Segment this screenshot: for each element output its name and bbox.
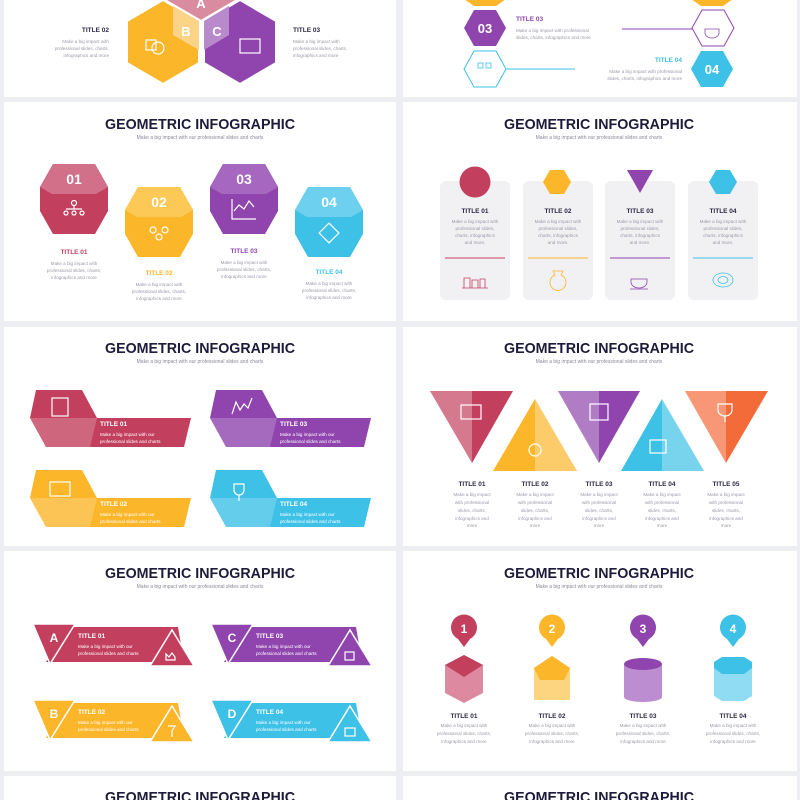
banner 04: professional slides and charts	[280, 519, 341, 524]
text: title 02: infographics and more	[136, 296, 182, 301]
text: title 04: infographics and more	[306, 295, 352, 300]
heading: Make a big impact with our professional slides and charts	[536, 584, 663, 590]
card 02: Make a big impact with	[535, 219, 582, 224]
item 4: professional slides, charts,	[706, 731, 760, 736]
banner B	[33, 700, 194, 742]
triangle titles: Make a big impact	[707, 492, 745, 497]
text: title 04: professional slides, charts,	[302, 288, 356, 293]
banner 03: TITLE 03	[280, 421, 307, 428]
triangle 03	[558, 391, 640, 463]
text: title 04: Make a big impact with professional	[609, 69, 682, 74]
heading	[105, 340, 295, 365]
panel: shape cards	[440, 116, 758, 300]
triangle titles	[453, 481, 745, 528]
card 03: TITLE 03	[626, 208, 654, 215]
outline hexagon with cup icon	[622, 10, 734, 46]
text: title 03: TITLE 03	[516, 16, 543, 23]
banner 01: professional slides and charts	[100, 439, 161, 444]
heading: Make a big impact with our professional slides and charts	[137, 359, 264, 365]
hexagon 04: 04	[705, 62, 720, 77]
triangle titles: Make a big impact	[516, 492, 554, 497]
triangle titles: infographics and	[645, 516, 679, 521]
text: title 01	[47, 249, 101, 280]
item 4: infographics and more	[710, 739, 756, 744]
octagon 04	[295, 187, 363, 257]
triangle titles: more	[467, 523, 478, 528]
text: title 02: professional slides, charts,	[55, 46, 109, 51]
banner 02: professional slides and charts	[100, 519, 161, 524]
card 01: and more.	[465, 240, 485, 245]
text: title 04: slides, charts, infographics and more	[607, 76, 682, 81]
hexagon 04	[691, 51, 733, 87]
text: title 04	[607, 57, 682, 81]
text: title 02: professional slides, charts,	[132, 289, 186, 294]
item 3: professional slides, charts,	[616, 731, 670, 736]
card 03: professional slides,	[620, 226, 660, 231]
octagon 02	[125, 187, 193, 257]
triangle titles: infographics and	[582, 516, 616, 521]
text: title 02	[132, 270, 186, 301]
heading: Make a big impact with our professional slides and charts	[137, 135, 264, 141]
banner C: TITLE 03	[256, 633, 283, 640]
item 2: professional slides, charts,	[525, 731, 579, 736]
text: title 02: TITLE 02	[145, 270, 173, 277]
panel: triangles	[430, 340, 768, 528]
text: title 03: infographics and more	[293, 53, 339, 58]
triangle titles: infographics and	[455, 516, 489, 521]
card 02: and more.	[548, 240, 568, 245]
item 3: 3	[640, 622, 647, 636]
triangle titles: more	[594, 523, 605, 528]
text: title 02: Make a big impact with	[136, 282, 183, 287]
banner 01: Make a big impact with our	[100, 432, 155, 437]
banner 01	[30, 390, 191, 447]
partial yellow hexagons	[464, 0, 733, 6]
card 04: and more.	[713, 240, 733, 245]
heading: GEOMETRIC INFOGRAPHIC	[504, 116, 694, 133]
card 04: TITLE 04	[709, 208, 737, 215]
heading: GEOMETRIC INFOGRAPHIC	[105, 116, 295, 133]
banner D: TITLE 04	[256, 709, 283, 716]
item 2	[525, 614, 579, 744]
triangle 02	[493, 399, 577, 471]
text: title 01: infographics and more	[51, 275, 97, 280]
triangle titles: with professional	[518, 500, 552, 505]
triangle titles: Make a big impact	[580, 492, 618, 497]
card 01: TITLE 01	[461, 208, 489, 215]
heading	[504, 340, 694, 365]
item 4: TITLE 04	[719, 713, 747, 720]
triangle titles: with professional	[582, 500, 616, 505]
text: title 01: Make a big impact with	[51, 261, 98, 266]
item 1: TITLE 01	[450, 713, 478, 720]
triangle titles: slides, charts,	[521, 508, 549, 513]
heading: GEOMETRIC INFOGRAPHIC	[504, 340, 694, 357]
card 02	[523, 170, 593, 300]
triangle titles: slides, charts,	[712, 508, 740, 513]
heading: Make a big impact with our professional slides and charts	[536, 135, 663, 141]
banner 04	[210, 470, 371, 527]
banner D: professional slides and charts	[256, 727, 317, 732]
heading	[105, 116, 295, 141]
octagon 04: 04	[321, 194, 337, 210]
item 3: infographics and more	[620, 739, 666, 744]
item 1: professional slides, charts,	[437, 731, 491, 736]
triangle titles: TITLE 03	[585, 481, 613, 488]
hexagon 03	[464, 10, 506, 46]
card 03	[605, 170, 675, 300]
item 1: 1	[461, 622, 468, 636]
banner B: B	[50, 707, 59, 721]
triangle titles: slides, charts,	[585, 508, 613, 513]
banner 01: TITLE 01	[100, 421, 127, 428]
triangle titles: slides, charts,	[648, 508, 676, 513]
text: title 03: Make a big impact with	[293, 39, 340, 44]
banner 04: TITLE 04	[280, 501, 307, 508]
text: title 02: Make a big impact with	[62, 39, 109, 44]
text: title 03	[293, 27, 347, 58]
triangle titles: TITLE 02	[521, 481, 549, 488]
triangle titles: TITLE 05	[712, 481, 740, 488]
card 01	[440, 166, 510, 300]
text: title 03: professional slides, charts,	[293, 46, 347, 51]
banner A: A	[50, 631, 59, 645]
panel: hexagon ABC (top-left partial)	[55, 0, 347, 84]
item 2: 2	[549, 622, 556, 636]
triangle 01	[430, 391, 513, 463]
item 1	[437, 614, 491, 744]
banner 02	[30, 470, 191, 527]
card 03: and more.	[630, 240, 650, 245]
banner A: professional slides and charts	[78, 651, 139, 656]
banner 04: Make a big impact with our	[280, 512, 335, 517]
triangle titles: Make a big impact	[643, 492, 681, 497]
panel: hexagon banners	[30, 340, 371, 527]
heading	[504, 116, 694, 141]
item 1: infographics and more	[441, 739, 487, 744]
text: title 03: professional slides, charts,	[217, 267, 271, 272]
hexagon A	[165, 0, 237, 21]
hexagon B	[127, 0, 199, 84]
text: title 03	[217, 248, 271, 279]
text: title 04: TITLE 04	[315, 269, 343, 276]
text: title 03: slides, charts, infographics and more	[516, 35, 591, 40]
heading: GEOMETRIC INFOGRAPHIC	[504, 565, 694, 582]
card 02: TITLE 02	[544, 208, 572, 215]
banner B: TITLE 02	[78, 709, 105, 716]
panel: ABCD banners	[33, 565, 372, 742]
triangle 05	[685, 391, 768, 463]
octagon 01: 01	[66, 171, 82, 187]
card 04	[688, 170, 758, 300]
heading: GEOMETRIC INFOGRAPHIC	[105, 565, 295, 582]
banner B: professional slides and charts	[78, 727, 139, 732]
item 3: Make a big impact with	[620, 723, 667, 728]
panel: hexagon timeline (top-right partial)	[464, 0, 734, 87]
item 4	[706, 614, 760, 744]
item 1: Make a big impact with	[441, 723, 488, 728]
card 01: charts, infographics	[455, 233, 496, 238]
octagon 03	[210, 164, 278, 234]
item 2: Make a big impact with	[529, 723, 576, 728]
text: title 03	[516, 16, 591, 40]
card 02: professional slides,	[538, 226, 578, 231]
banner C	[211, 624, 372, 666]
triangle titles: infographics and	[709, 516, 743, 521]
card 01: Make a big impact with	[452, 219, 499, 224]
banner A: Make a big impact with our	[78, 644, 133, 649]
banner 03	[210, 390, 371, 447]
triangle titles: more	[721, 523, 732, 528]
banner A	[33, 624, 194, 666]
banner D: Make a big impact with our	[256, 720, 311, 725]
panel: pins and 3D shapes	[437, 565, 760, 744]
text: title 01: professional slides, charts,	[47, 268, 101, 273]
text: title 03: Make a big impact with professional	[516, 28, 589, 33]
hexagon C: C	[212, 24, 222, 39]
hexagon C	[204, 0, 276, 84]
heading: Make a big impact with our professional slides and charts	[137, 584, 264, 590]
card 03: Make a big impact with	[617, 219, 664, 224]
triangle titles: TITLE 01	[458, 481, 486, 488]
triangle titles: more	[530, 523, 541, 528]
octagon 03: 03	[236, 171, 252, 187]
banner 03: professional slides and charts	[280, 439, 341, 444]
triangle titles: with professional	[709, 500, 743, 505]
card 03: charts, infographics	[620, 233, 661, 238]
triangle titles: Make a big impact	[453, 492, 491, 497]
text: title 04: TITLE 04	[655, 57, 682, 64]
octagon 01	[40, 164, 108, 234]
banner C: Make a big impact with our	[256, 644, 311, 649]
card 01: professional slides,	[455, 226, 495, 231]
text: title 04: Make a big impact with	[306, 281, 353, 286]
card 02: charts, infographics	[538, 233, 579, 238]
banner D: D	[228, 707, 237, 721]
text: title 03: Make a big impact with	[221, 260, 268, 265]
banner C: C	[228, 631, 237, 645]
banner B: Make a big impact with our	[78, 720, 133, 725]
triangle titles: with professional	[455, 500, 489, 505]
banner 02: Make a big impact with our	[100, 512, 155, 517]
banner 03: Make a big impact with our	[280, 432, 335, 437]
triangle titles: TITLE 04	[648, 481, 676, 488]
banner D	[211, 700, 372, 742]
hexagon 03: 03	[478, 21, 492, 36]
text: title 02: TITLE 02	[82, 27, 109, 34]
card 04: professional slides,	[703, 226, 743, 231]
item 3	[616, 614, 670, 744]
heading	[504, 565, 694, 590]
heading: GEOMETRIC INFOGRAPHIC	[105, 340, 295, 357]
outline hexagon with icon	[464, 51, 575, 87]
card 04: Make a big impact with	[700, 219, 747, 224]
card 04: charts, infographics	[703, 233, 744, 238]
panel: octagon steps	[40, 116, 363, 301]
banner A: TITLE 01	[78, 633, 105, 640]
triangle titles: infographics and	[518, 516, 552, 521]
item 3: TITLE 03	[629, 713, 657, 720]
text: title 04	[302, 269, 356, 300]
text: title 03: TITLE 03	[293, 27, 320, 34]
hexagon B: B	[181, 24, 191, 39]
text: title 01: TITLE 01	[60, 249, 88, 256]
text: title 03: infographics and more	[221, 274, 267, 279]
octagon 02: 02	[151, 194, 167, 210]
text: title 03: TITLE 03	[230, 248, 258, 255]
triangle titles: with professional	[645, 500, 679, 505]
item 4: Make a big impact with	[710, 723, 757, 728]
triangle titles: more	[657, 523, 668, 528]
banner 02: TITLE 02	[100, 501, 127, 508]
heading	[105, 565, 295, 590]
triangle titles: slides, charts,	[458, 508, 486, 513]
text: title 02	[55, 27, 109, 58]
banner C: professional slides and charts	[256, 651, 317, 656]
triangle 04	[621, 399, 704, 471]
text: title 02: infographics and more	[64, 53, 109, 58]
item 2: infographics and more	[529, 739, 575, 744]
heading: Make a big impact with our professional slides and charts	[536, 359, 663, 365]
item 2: TITLE 02	[538, 713, 566, 720]
item 4: 4	[730, 622, 737, 636]
